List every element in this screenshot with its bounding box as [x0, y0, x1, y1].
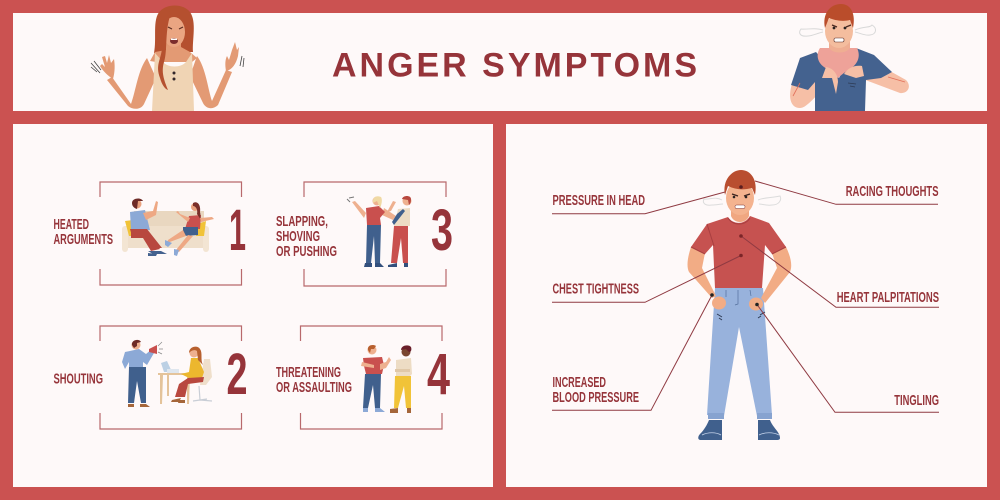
- label: HEATED: [54, 216, 89, 233]
- frame: [300, 326, 442, 429]
- illustration: angry woman: [91, 5, 244, 111]
- frame: [304, 182, 446, 286]
- card 1: heated arguments: [54, 182, 246, 285]
- frame: [100, 326, 242, 429]
- panel: behaviours: [13, 124, 493, 487]
- illustration: two men pushing: [347, 196, 412, 267]
- callout: tingling: TINGLING: [894, 392, 939, 409]
- label: [276, 364, 352, 396]
- frame: [100, 182, 242, 285]
- illustration: couple arguing on sofa: [122, 199, 214, 256]
- callout: chest tightness: [552, 254, 743, 302]
- title: ANGER SYMPTOMS: [332, 46, 700, 84]
- panel: title banner: [13, 13, 987, 111]
- callout: heart palpitations: HEART PALPITATIONS: [837, 289, 939, 306]
- illustration: man with megaphone at desk: [122, 340, 212, 407]
- callout: increased blood pressure: INCREASED: [552, 374, 606, 391]
- arms: [688, 247, 716, 298]
- callout: racing thoughts: RACING THOUGHTS: [846, 183, 938, 200]
- illustration: man threatening woman: [361, 345, 412, 413]
- number 4: 4: [427, 342, 450, 407]
- label: SHOVING: [276, 228, 320, 245]
- shirt: [691, 216, 786, 288]
- label: ARGUMENTS: [54, 231, 113, 248]
- card 4: threatening or assaulting: [276, 326, 450, 429]
- callout: pressure in head: PRESSURE IN HEAD: [552, 192, 645, 209]
- fists: [712, 296, 726, 310]
- callout: racing thoughts: [755, 181, 938, 204]
- number 2: 2: [226, 342, 248, 407]
- label: SHOUTING: [54, 370, 103, 387]
- shoes: [698, 420, 780, 440]
- callout: increased blood pressure: BLOOD PRESSURE: [552, 389, 639, 406]
- illustration: standing man: [688, 170, 791, 440]
- label: SLAPPING,: [276, 213, 328, 230]
- callout: heart palpitations: [739, 234, 939, 307]
- illustration: angry man tearing shirt: [790, 4, 909, 111]
- label: [54, 216, 113, 248]
- label: OR PUSHING: [276, 243, 337, 260]
- hair: [724, 170, 756, 195]
- card 3: slapping shoving or pushing: [276, 182, 453, 286]
- label: [276, 213, 337, 260]
- number 3: 3: [431, 198, 453, 263]
- label: THREATENING: [276, 364, 341, 381]
- card 2: shouting: [54, 326, 248, 429]
- callout: pressure in head: [552, 185, 743, 214]
- panel: body symptoms: [506, 124, 987, 487]
- callout: tingling: [755, 303, 939, 412]
- number 1: 1: [229, 198, 246, 263]
- callout: increased blood pressure: [552, 293, 714, 410]
- jeans: [707, 288, 772, 416]
- neck and head: [731, 205, 749, 222]
- callout: chest tightness: CHEST TIGHTNESS: [552, 281, 639, 298]
- label: OR ASSAULTING: [276, 379, 352, 396]
